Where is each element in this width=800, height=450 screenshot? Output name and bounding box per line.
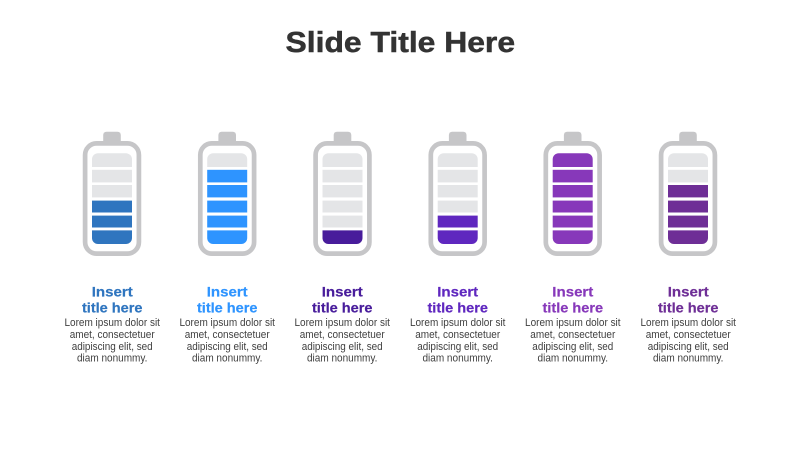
heading: column 2 xyxy=(197,284,258,315)
icon: battery 4, two bars filled xyxy=(431,132,485,254)
text block: column 1: Lorem ipsum dolor sit xyxy=(64,317,160,329)
text block: column 1: amet, consectetuer xyxy=(70,329,155,341)
heading: column 4: Insert xyxy=(437,284,479,300)
text block: column 5: diam nonummy. xyxy=(538,353,608,365)
icon: battery 5, six bars filled xyxy=(546,132,600,254)
heading: column 1: title here xyxy=(82,299,143,315)
heading: column 3: Insert xyxy=(322,284,363,300)
text block: column 3 xyxy=(294,317,390,365)
text block: column 6: diam nonummy. xyxy=(653,353,723,365)
heading: column 5 xyxy=(543,284,603,315)
heading: column 3: title here xyxy=(312,299,373,315)
text block: column 2: Lorem ipsum dolor sit xyxy=(179,317,275,329)
heading: column 2: title here xyxy=(197,299,258,315)
heading: column 1: Insert xyxy=(92,284,133,300)
heading: column 5: title here xyxy=(543,299,603,315)
text block: column 4: amet, consectetuer xyxy=(415,329,501,341)
text block: column 4: diam nonummy. xyxy=(422,353,493,365)
heading: column 5: Insert xyxy=(552,284,594,300)
panel: column 5 xyxy=(525,132,621,365)
text block: column 3: adipiscing elit, sed xyxy=(302,341,383,353)
text block: column 5: amet, consectetuer xyxy=(530,329,616,341)
heading: column 1 xyxy=(82,284,143,315)
text block: column 6: adipiscing elit, sed xyxy=(648,341,729,353)
text block: column 2: adipiscing elit, sed xyxy=(187,341,268,353)
heading: column 4: title here xyxy=(427,299,488,315)
text block: column 1: adipiscing elit, sed xyxy=(72,341,153,353)
heading: column 3 xyxy=(312,284,373,315)
text block: column 2: diam nonummy. xyxy=(192,353,262,365)
text block: column 5: Lorem ipsum dolor sit xyxy=(525,317,621,329)
text block: column 1: diam nonummy. xyxy=(77,353,147,365)
text block: column 3: amet, consectetuer xyxy=(300,329,385,341)
heading: column 6: Insert xyxy=(668,284,709,300)
heading: column 4 xyxy=(427,284,488,315)
text block: column 4: Lorem ipsum dolor sit xyxy=(410,317,505,329)
text block: column 6: amet, consectetuer xyxy=(646,329,731,341)
text block: column 3: diam nonummy. xyxy=(307,353,377,365)
panel: column 3 xyxy=(294,132,390,365)
icon: battery 1, three bars filled xyxy=(85,132,139,254)
heading: column 6: title here xyxy=(658,299,719,315)
icon: battery 6, four bars filled xyxy=(661,132,715,254)
text block: column 6 xyxy=(640,317,736,365)
text block: column 4 xyxy=(410,317,505,365)
text block: column 1 xyxy=(64,317,160,365)
title: Slide Title Here xyxy=(286,27,515,59)
text block: column 2 xyxy=(179,317,275,365)
panel: column 1 xyxy=(64,132,160,365)
text block: column 5: adipiscing elit, sed xyxy=(532,341,613,353)
panel: column 6 xyxy=(640,132,736,365)
heading: column 6 xyxy=(658,284,719,315)
text block: column 6: Lorem ipsum dolor sit xyxy=(640,317,736,329)
text block: column 5 xyxy=(525,317,621,365)
text block: column 2: amet, consectetuer xyxy=(185,329,270,341)
text block: column 3: Lorem ipsum dolor sit xyxy=(294,317,390,329)
panel: column 4 xyxy=(410,132,505,365)
panel: column 2 xyxy=(179,132,275,365)
text block: column 4: adipiscing elit, sed xyxy=(417,341,498,353)
icon: battery 3, one bar filled xyxy=(316,132,369,254)
icon: battery 2, five bars filled xyxy=(200,132,254,254)
heading: column 2: Insert xyxy=(207,284,248,300)
